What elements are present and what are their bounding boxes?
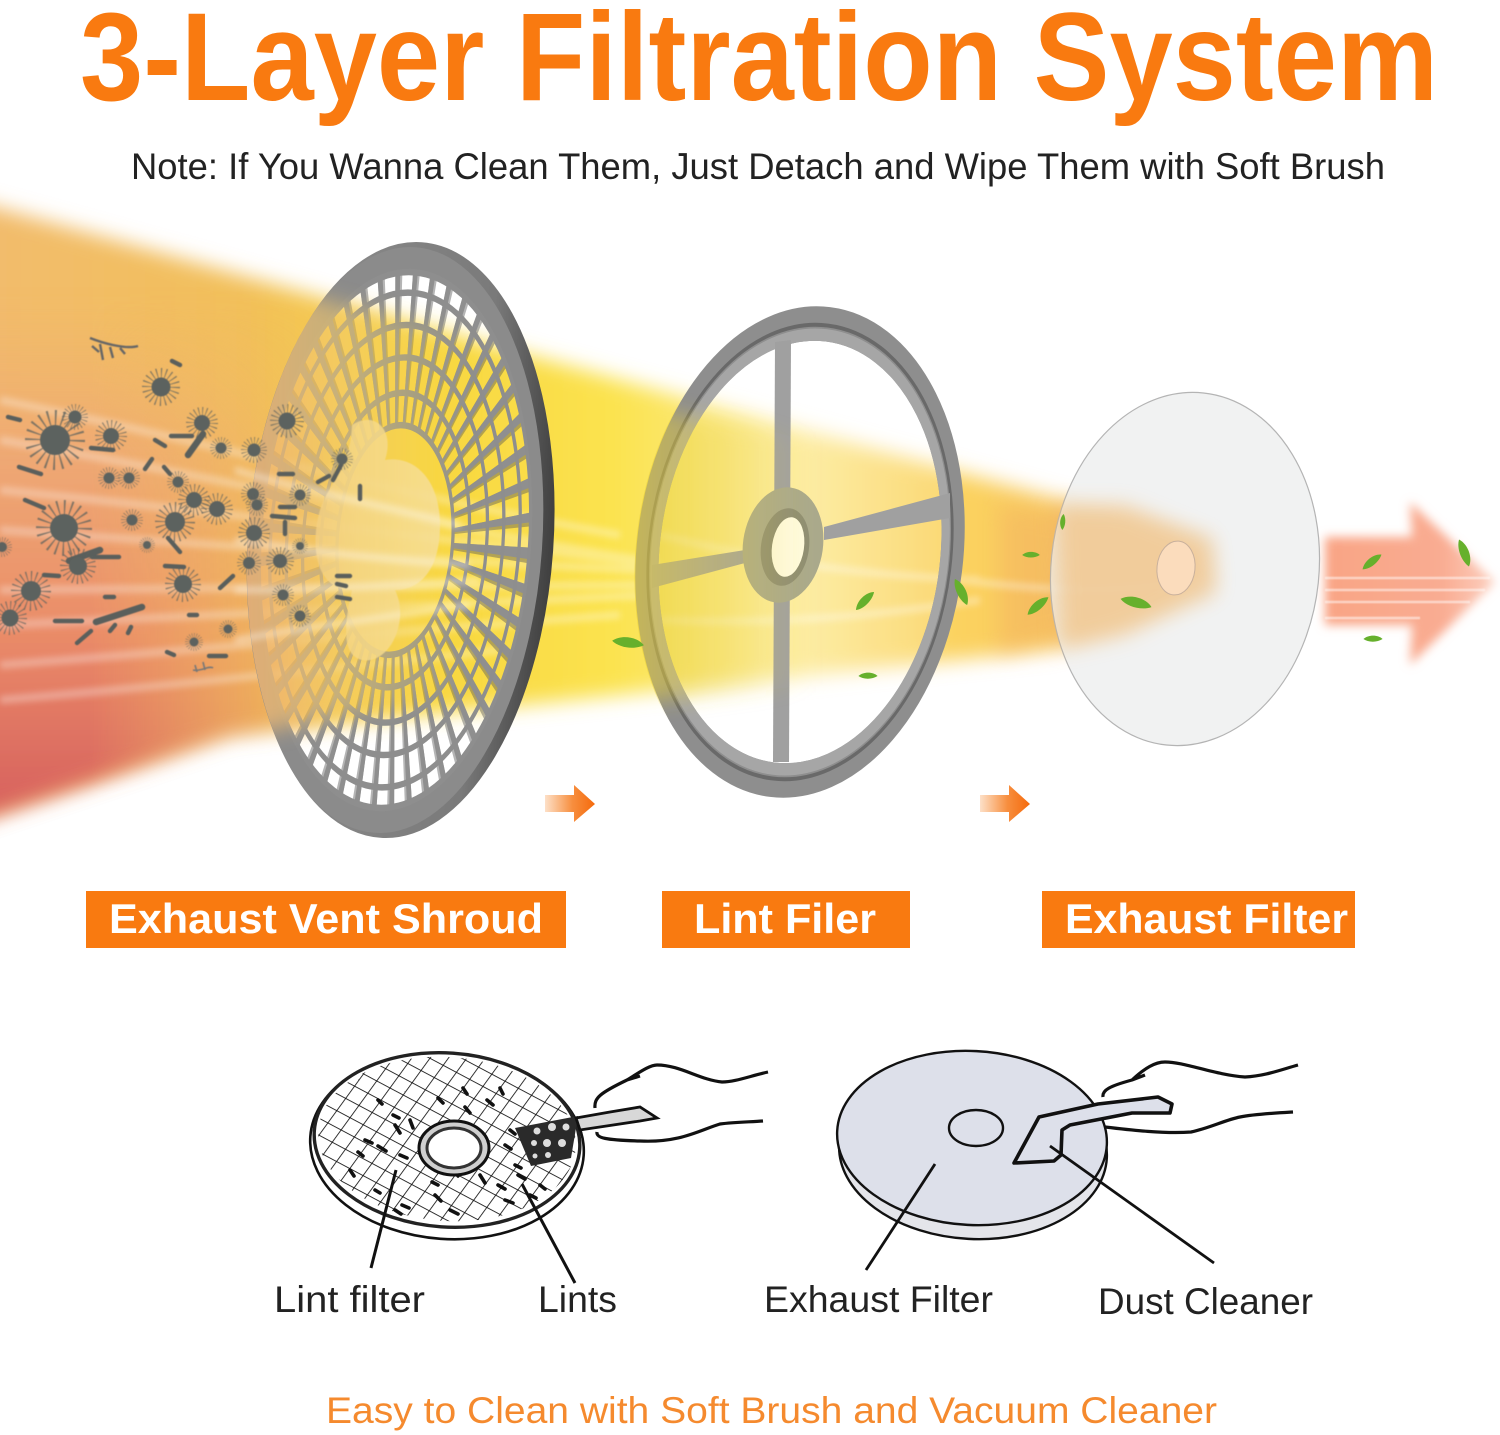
- viruses: [32, 418, 78, 462]
- caption: lint filter: Lint filter: [274, 1279, 425, 1320]
- mesh: [313, 1048, 581, 1230]
- shroud grille spokes: [286, 342, 504, 738]
- lint brush: [515, 1116, 578, 1166]
- shroud concentric ribs: [242, 263, 548, 817]
- hand: [595, 1065, 768, 1141]
- diagram: cleaning exhaust filter: [833, 1044, 1298, 1270]
- airflow beam: [0, 200, 1215, 822]
- wash streaks: [235, 470, 480, 640]
- lint specks: [350, 1088, 545, 1214]
- label: lint filer: [662, 891, 910, 948]
- leader lines: [371, 1170, 575, 1283]
- hub ring: [419, 1121, 489, 1175]
- label: exhaust vent shroud: Exhaust Vent Shroud: [109, 895, 543, 942]
- dust cleaner cloth: [1014, 1097, 1172, 1163]
- disk beam tint: [1055, 505, 1215, 650]
- leader lines: [866, 1146, 1214, 1270]
- label: exhaust filter: Exhaust Filter: [1065, 895, 1348, 942]
- diagram: cleaning lint filter: [304, 1044, 768, 1283]
- airflow arrow head: [1325, 502, 1495, 665]
- bottom fragment: [193, 662, 213, 672]
- subtitle note: Note: If You Wanna Clean Them, Just Detach and Wipe Them with Soft Brush: [131, 146, 1385, 187]
- lint filter hub: [735, 482, 831, 608]
- step arrow 1: [545, 785, 595, 822]
- green leaves: [612, 514, 1474, 679]
- caption: exhaust filter: Exhaust Filter: [764, 1279, 993, 1320]
- shroud hub: [315, 420, 440, 660]
- label: lint filer: Lint Filer: [694, 895, 876, 942]
- dust particles: [0, 338, 360, 672]
- exhaust filter disk: [1033, 379, 1337, 759]
- rods: [8, 361, 360, 656]
- top fragment: [90, 338, 138, 360]
- lint filter spokes: [773, 340, 791, 762]
- caption: lints: Lints: [538, 1279, 617, 1320]
- exhaust vent shroud disk: [235, 239, 567, 841]
- centre hole: [949, 1110, 1003, 1146]
- beam wash over shroud: [247, 290, 452, 741]
- disk hole: [1154, 539, 1198, 597]
- lint filter disk: [609, 289, 991, 815]
- beam wash over lint filter: [634, 406, 797, 714]
- footer note: Easy to Clean with Soft Brush and Vacuum Cleaner: [326, 1390, 1217, 1431]
- hand: [1103, 1062, 1298, 1133]
- caption: dust cleaner: Dust Cleaner: [1098, 1281, 1313, 1322]
- step arrow 2: [980, 785, 1030, 822]
